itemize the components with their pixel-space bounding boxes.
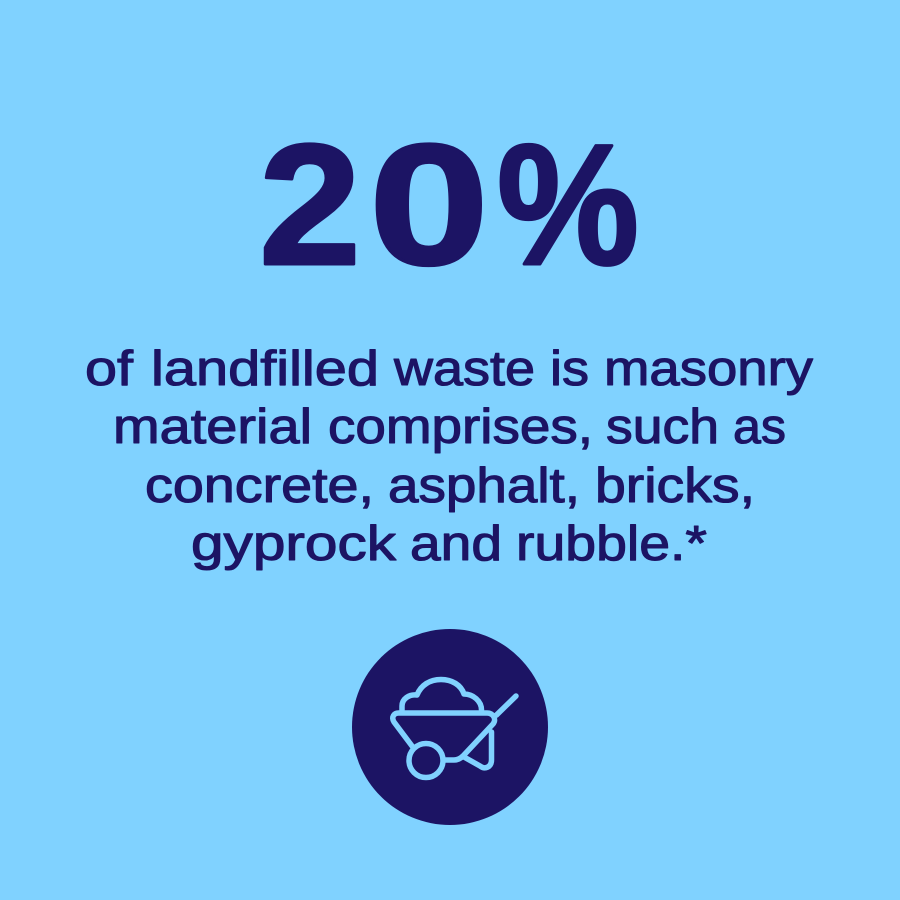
text block: description: is: [550, 342, 589, 396]
text block: description: asphalt,: [388, 459, 580, 513]
icon: wheelbarrow in circle: [352, 629, 548, 825]
text block: description: material: [113, 400, 312, 454]
title: 20%: 0: [369, 109, 489, 301]
text block: description: of: [85, 342, 133, 396]
text block: description: and: [410, 517, 502, 571]
text block: description: landfilled: [151, 342, 379, 396]
text block: description: [85, 342, 814, 571]
text block: description: masonry: [604, 342, 814, 396]
text block: description: concrete,: [145, 459, 374, 513]
text block: description: such: [606, 400, 719, 454]
text block: description: bricks,: [595, 459, 755, 513]
title: 20%: %: [497, 109, 639, 301]
text block: description: waste: [393, 342, 535, 396]
text block: description: gyprock: [191, 517, 397, 571]
title: 20%: 2: [259, 109, 361, 301]
text block: description: as: [733, 400, 786, 454]
text block: description: rubble.*: [516, 517, 707, 571]
text block: description: comprises,: [328, 400, 593, 454]
title: 20%: [259, 109, 639, 301]
